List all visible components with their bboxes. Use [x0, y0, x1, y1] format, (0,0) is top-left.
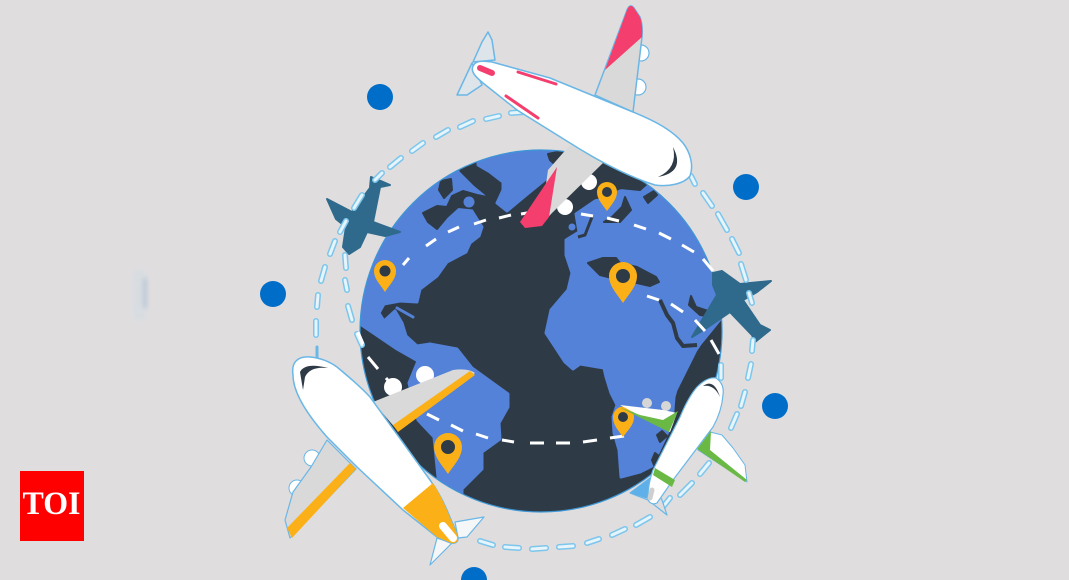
left wing	[285, 440, 356, 538]
orbit dashes	[316, 112, 753, 549]
tail fin	[630, 478, 667, 515]
pin: North America	[374, 260, 396, 292]
tail window	[443, 526, 453, 538]
right wing	[698, 432, 747, 482]
fuselage	[293, 357, 458, 543]
engines	[384, 366, 434, 396]
tail cone	[650, 490, 652, 498]
tail fins	[430, 517, 484, 565]
logo text: TOI	[22, 486, 80, 522]
teal plane: upper left	[327, 177, 400, 254]
engines lower wing	[557, 174, 597, 215]
plane: yellow bottom left	[285, 347, 484, 565]
tail fins	[457, 32, 495, 95]
cockpit	[300, 366, 328, 390]
Red Sea	[660, 300, 697, 346]
cockpit	[658, 147, 677, 177]
land: Eurasia and Africa	[544, 185, 721, 478]
dark seas and islands	[423, 151, 714, 465]
right wing	[373, 369, 475, 430]
cockpit	[703, 384, 720, 397]
lower wing	[540, 145, 603, 226]
Caribbean island	[397, 308, 413, 317]
lower wing tip	[520, 167, 557, 228]
globe	[359, 149, 723, 513]
pin: Europe	[597, 182, 617, 211]
Europe coast line	[578, 217, 592, 237]
logo background	[20, 471, 84, 541]
upper wing	[595, 6, 642, 112]
left wing engines	[642, 398, 671, 411]
right wing green	[697, 431, 747, 482]
left wing green	[619, 407, 678, 432]
upper wing tip	[605, 6, 642, 70]
teal plane: right	[692, 271, 771, 342]
left wing	[620, 405, 677, 432]
nose tip	[316, 347, 318, 358]
TOI logo	[20, 471, 84, 541]
map pins	[374, 182, 637, 474]
plane: green bottom right	[619, 378, 747, 515]
land: Greenland	[476, 150, 557, 212]
blue dots	[260, 84, 788, 580]
faint smudge	[133, 270, 146, 320]
pin: North Africa	[609, 262, 637, 303]
green stripe	[653, 468, 675, 487]
blue islands	[464, 196, 474, 208]
pin: South America	[434, 433, 462, 474]
land: Americas	[360, 170, 510, 494]
tail fin shade	[630, 478, 650, 499]
yellow tail section	[403, 483, 458, 543]
engines upper wing	[630, 45, 649, 95]
pin: Southern Africa	[613, 406, 634, 437]
pink stripes	[480, 68, 556, 118]
left wing edge	[287, 463, 356, 538]
right wing edge	[393, 371, 475, 432]
fuselage	[648, 378, 723, 504]
engines left wing	[289, 450, 320, 496]
fuselage	[472, 61, 692, 186]
illustration: planes circling the globe	[20, 5, 788, 580]
white dashed routes	[358, 212, 719, 443]
plane: pink top	[457, 6, 692, 228]
